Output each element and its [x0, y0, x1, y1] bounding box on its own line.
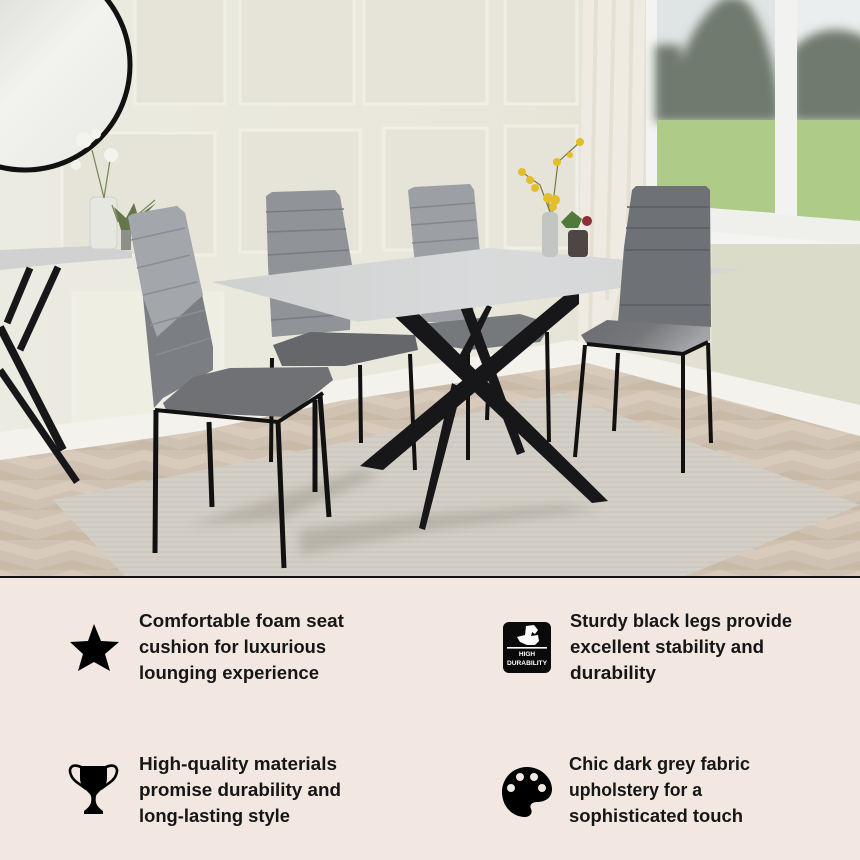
window [646, 0, 860, 244]
text: upholstery: Chic dark grey fabric [569, 753, 750, 774]
baseboard [0, 340, 860, 460]
text: upholstery: sophisticated touch [569, 805, 743, 826]
table top [212, 248, 742, 322]
text: materials: High-quality materials [139, 753, 337, 774]
wall panelling [62, 0, 577, 423]
text: foam seat: cushion for luxurious [139, 636, 326, 657]
icon: high durability: HIGH [519, 651, 535, 658]
chair: front left [128, 206, 333, 568]
rug shadows [190, 470, 600, 555]
text: sturdy legs: Sturdy black legs provide [570, 610, 792, 631]
chair: right [575, 186, 711, 473]
icon: high durability [503, 622, 551, 673]
info panel [0, 578, 860, 860]
curtain [578, 0, 645, 342]
wall [0, 0, 860, 480]
photo: dining room scene [0, 0, 860, 576]
table legs [360, 294, 608, 530]
icon: star [70, 624, 119, 671]
text: sturdy legs: excellent stability and [570, 636, 764, 657]
text: materials: promise durability and [139, 779, 341, 800]
vase with yellow flowers [518, 138, 592, 257]
chair: back left behind table [266, 190, 418, 470]
divider line [0, 576, 860, 578]
rug [53, 393, 860, 576]
console table [0, 246, 132, 482]
chair: back right behind table [408, 184, 552, 460]
right wall [712, 230, 860, 410]
floor [0, 358, 860, 576]
text: sturdy legs [570, 610, 792, 683]
icon: high durability: DURABILITY [507, 660, 548, 667]
text: sturdy legs: durability [570, 662, 657, 683]
text: foam seat: lounging experience [139, 662, 319, 683]
left vase with white flowers [71, 129, 156, 250]
text: foam seat [139, 610, 344, 683]
text: upholstery [569, 753, 750, 826]
mirror [0, 0, 130, 170]
text: materials: long-lasting style [139, 805, 290, 826]
text: upholstery: upholstery for a [569, 779, 703, 800]
text: foam seat: Comfortable foam seat [139, 610, 344, 631]
icon: palette [502, 767, 552, 817]
icon: trophy [70, 766, 117, 814]
text: materials [139, 753, 341, 826]
